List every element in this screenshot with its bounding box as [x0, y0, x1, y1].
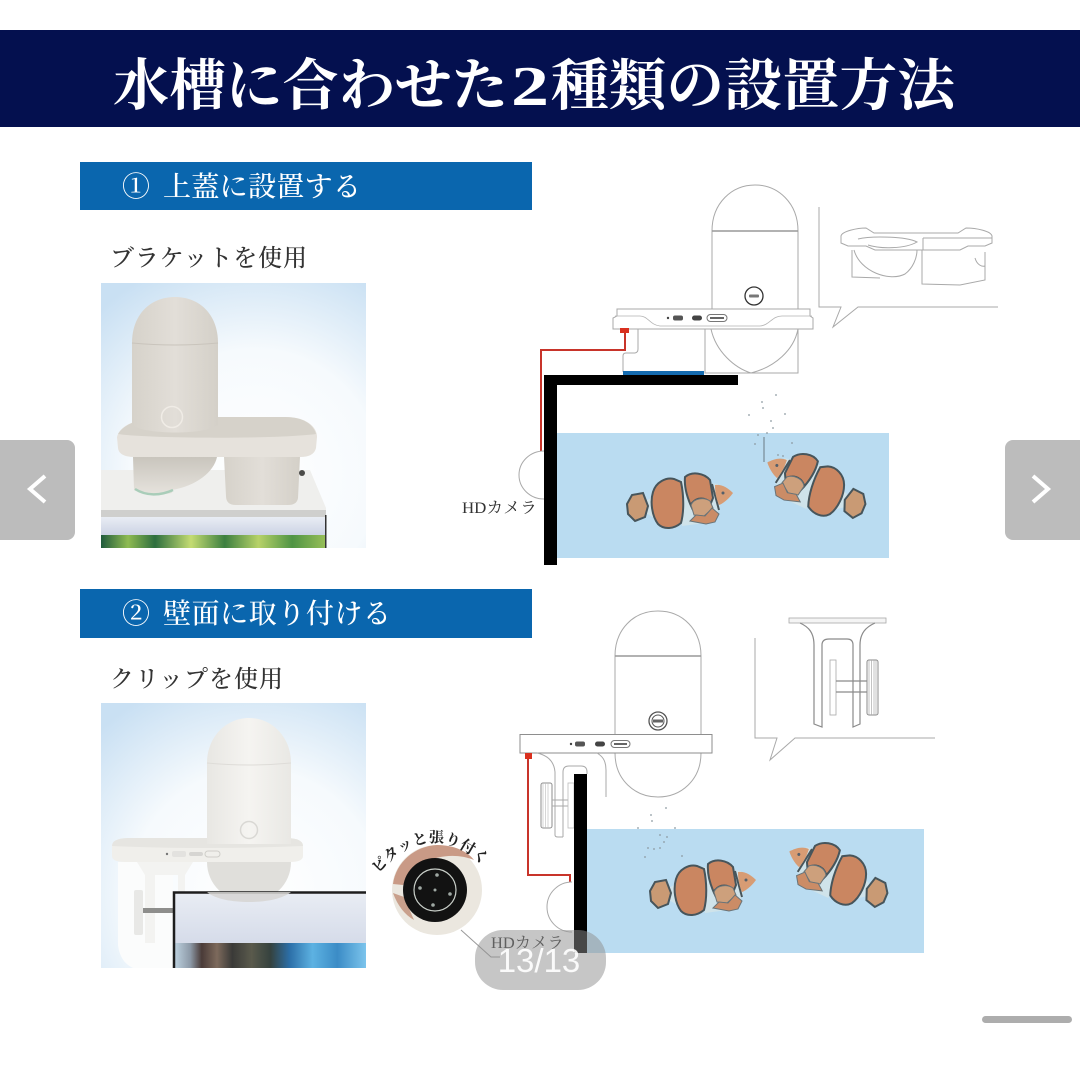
title: 2: [511, 56, 549, 118]
bubbles: [748, 394, 793, 457]
sub heading: bracket: ブラケットを使用: [110, 245, 307, 272]
water: [557, 433, 889, 558]
clip outline: [537, 753, 606, 837]
capsule outline: [712, 185, 798, 309]
label: HD camera: HDカメラ: [491, 935, 564, 952]
red cable: [541, 328, 629, 451]
tray with ports: [520, 734, 712, 753]
section heading 2: [80, 589, 532, 638]
tank wall: [574, 774, 587, 953]
section heading 2: 壁面に取り付ける: [163, 598, 391, 630]
clip line drawing: [789, 618, 886, 727]
leader line: [461, 930, 500, 957]
water: [587, 829, 924, 953]
photo circle: magnetic camera: [372, 830, 486, 935]
push button: [745, 287, 763, 305]
title banner: [0, 30, 1080, 127]
push button: [649, 712, 667, 730]
camera outline: [547, 882, 572, 932]
capsule outline: [615, 611, 701, 734]
red cable: [525, 753, 570, 882]
callout: bracket detail: [819, 207, 998, 327]
curved label: ピタッと張り付く: [372, 830, 486, 870]
section heading 2: ②: [122, 598, 150, 630]
section heading 1: 上蓋に設置する: [163, 171, 361, 203]
section heading 1: ①: [122, 171, 150, 203]
air tube: [763, 437, 765, 462]
tank wall: [544, 375, 738, 565]
fish: [650, 860, 756, 915]
title: 種類の設置方法: [551, 56, 960, 118]
label: HD camera: HDカメラ: [462, 500, 537, 517]
bubbles: [637, 807, 683, 858]
page counter pill: 13/13: [498, 942, 580, 979]
callout: clip detail: [755, 618, 935, 760]
photo: clip mount: [101, 703, 366, 968]
page counter pill: [475, 930, 606, 990]
diagram: wall installation: [520, 611, 924, 953]
title: 水槽に合わせた: [113, 56, 508, 118]
tray with ports: [613, 309, 813, 329]
fish: [757, 444, 874, 527]
bracket line drawing: [841, 228, 992, 285]
photo: bracket mount: [101, 283, 366, 548]
blue pad: [623, 371, 704, 375]
next button: [1005, 440, 1080, 540]
diagram: lid installation: [462, 185, 889, 565]
section heading 1: [80, 162, 532, 210]
fish: [627, 473, 733, 528]
sub heading: clip: クリップを使用: [110, 666, 283, 693]
previous button: [0, 440, 75, 540]
camera outline: [519, 451, 544, 499]
title: [113, 56, 960, 118]
fish: [779, 833, 896, 916]
scroll indicator: [982, 1016, 1072, 1023]
